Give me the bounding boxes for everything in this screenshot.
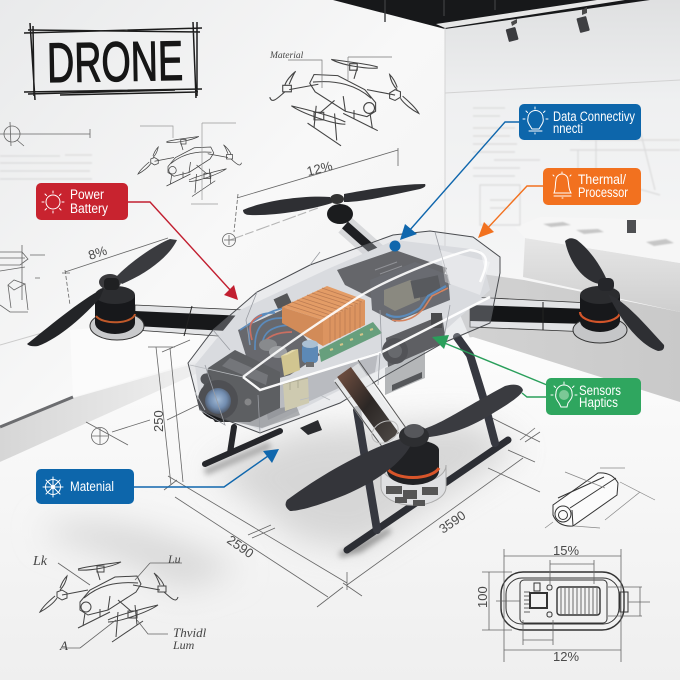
arrow: material connector <box>134 449 279 487</box>
arrow: sensors connector <box>432 335 547 397</box>
sketch: crosshair and note line, top left <box>0 122 90 146</box>
callout: Power Battery: Battery <box>70 201 108 216</box>
yellow capacitor <box>281 349 300 376</box>
sketch: battery cell <box>545 468 655 528</box>
drone: left arm, motor and propeller <box>27 239 245 346</box>
technical drawing: top view with dimensions: 12% <box>553 649 579 664</box>
annotation: Material: Material <box>269 51 304 61</box>
arrow: battery connector <box>128 202 238 300</box>
callout: Material <box>36 469 134 504</box>
dimension: 3590 <box>343 418 540 596</box>
camera module <box>200 350 280 422</box>
dimension: 2590 <box>164 476 347 607</box>
dimension: 250 <box>86 340 198 485</box>
processor chip on top <box>337 250 447 305</box>
dark panels under the rim <box>262 352 378 420</box>
sketch callout lines upper drone <box>288 57 392 88</box>
callout: Power Battery: Power <box>70 187 104 202</box>
callout: Thermal Processor <box>543 168 641 205</box>
title: DRONE in sketched box: DRONE <box>46 29 184 94</box>
drone: transparent shell <box>188 231 500 433</box>
sketch: lower left drone: A <box>59 638 68 653</box>
shadows on the table <box>40 420 520 590</box>
sketch: drone middle left <box>138 136 242 196</box>
callout: Data Connectivity <box>519 104 641 140</box>
icon: sun <box>42 191 64 213</box>
lower electronics bay <box>386 315 446 367</box>
dimension: 8% <box>62 238 168 305</box>
sketch: lower left drone <box>32 552 207 653</box>
dimension: 2590: 2590 <box>224 532 257 561</box>
drone: front arm <box>335 360 406 448</box>
dimension: 3590: 3590 <box>436 508 468 536</box>
sketch: lower left drone: Thvidl <box>173 625 207 640</box>
dimension: 12% <box>222 148 398 246</box>
technical drawing: top view with dimensions: 100 <box>475 586 490 608</box>
wiring bundle <box>240 308 290 350</box>
technical drawing: top view with dimensions <box>475 543 650 664</box>
dimension: 250: 250 <box>151 410 166 432</box>
sketch: lower left drone: Lum <box>172 638 195 652</box>
beige relay <box>283 378 309 411</box>
arrow: thermal connector <box>478 186 543 238</box>
drone: right arm, motor and propeller <box>470 238 664 351</box>
callout: Thermal Processor: Thermal/ <box>578 172 626 187</box>
callout: Data Connectivity: Data Connectivy <box>553 109 635 124</box>
callout: Thermal Processor: Processor <box>578 185 628 200</box>
dimension: 12%: 12% <box>305 158 334 179</box>
icon: bell <box>553 172 571 198</box>
title: DRONE in sketched box <box>24 22 202 100</box>
wall notes: faint blurred text <box>0 108 680 225</box>
icon: crosshair wheel <box>43 477 63 497</box>
callout: Sensors Haptics: Sensors <box>579 383 621 398</box>
green circuit board <box>319 322 382 362</box>
arrow: data connector <box>390 122 519 252</box>
callout: Sensors Haptics: Haptics <box>579 395 618 410</box>
sketch: lower left drone: Lu <box>167 552 181 566</box>
sketch: bracket box left wall <box>0 245 45 312</box>
sketch: drone upper right <box>270 59 419 146</box>
blue capacitor <box>302 344 318 363</box>
drone: pod internals <box>195 240 490 430</box>
callout: Material: Matenial <box>70 479 114 494</box>
callout: Power Battery <box>36 183 128 220</box>
icon: glowing bulb <box>551 382 577 407</box>
drone: rear arm and propeller <box>243 184 425 265</box>
drone: front motor and propeller <box>286 385 523 511</box>
sketch callouts middle drone <box>140 123 236 204</box>
callout: Sensors Haptics <box>546 378 641 415</box>
dimension: 8%: 8% <box>86 243 109 263</box>
drone: landing gear <box>205 337 508 550</box>
orange heat sink <box>282 286 365 320</box>
sketch: lower left drone: Lk <box>32 554 48 569</box>
technical drawing: top view with dimensions: 15% <box>553 543 579 558</box>
callout: Data Connectivity: nnecti <box>553 121 583 136</box>
icon: light bulb <box>523 107 548 134</box>
